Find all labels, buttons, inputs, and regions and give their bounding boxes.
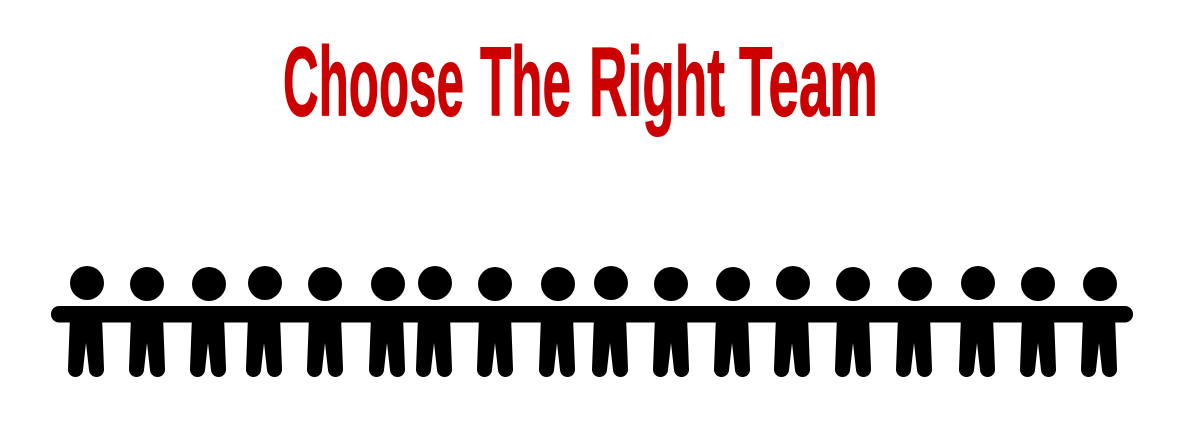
person 11 [653,267,689,377]
team of linked people [51,266,1133,377]
person 18 [1081,267,1117,377]
person 14 [835,267,871,377]
linked arms bar [51,306,1133,322]
person 9 [539,267,575,377]
title: Choose [283,26,464,136]
person 1 [68,266,104,377]
person 13 [774,266,810,377]
person 3 [190,267,226,377]
person 8 [477,267,513,377]
person 17 [1020,267,1056,377]
person 4 [246,266,282,377]
person 10 [592,266,628,377]
person 7 [416,266,452,377]
person 2 [129,267,165,377]
title: Right [589,26,725,136]
title [283,26,878,136]
person 16 [959,266,995,377]
person 6 [369,267,405,377]
person 15 [896,267,932,377]
person 5 [307,267,343,377]
person 12 [714,267,750,377]
title: The [480,26,571,136]
title: Team [739,26,878,136]
